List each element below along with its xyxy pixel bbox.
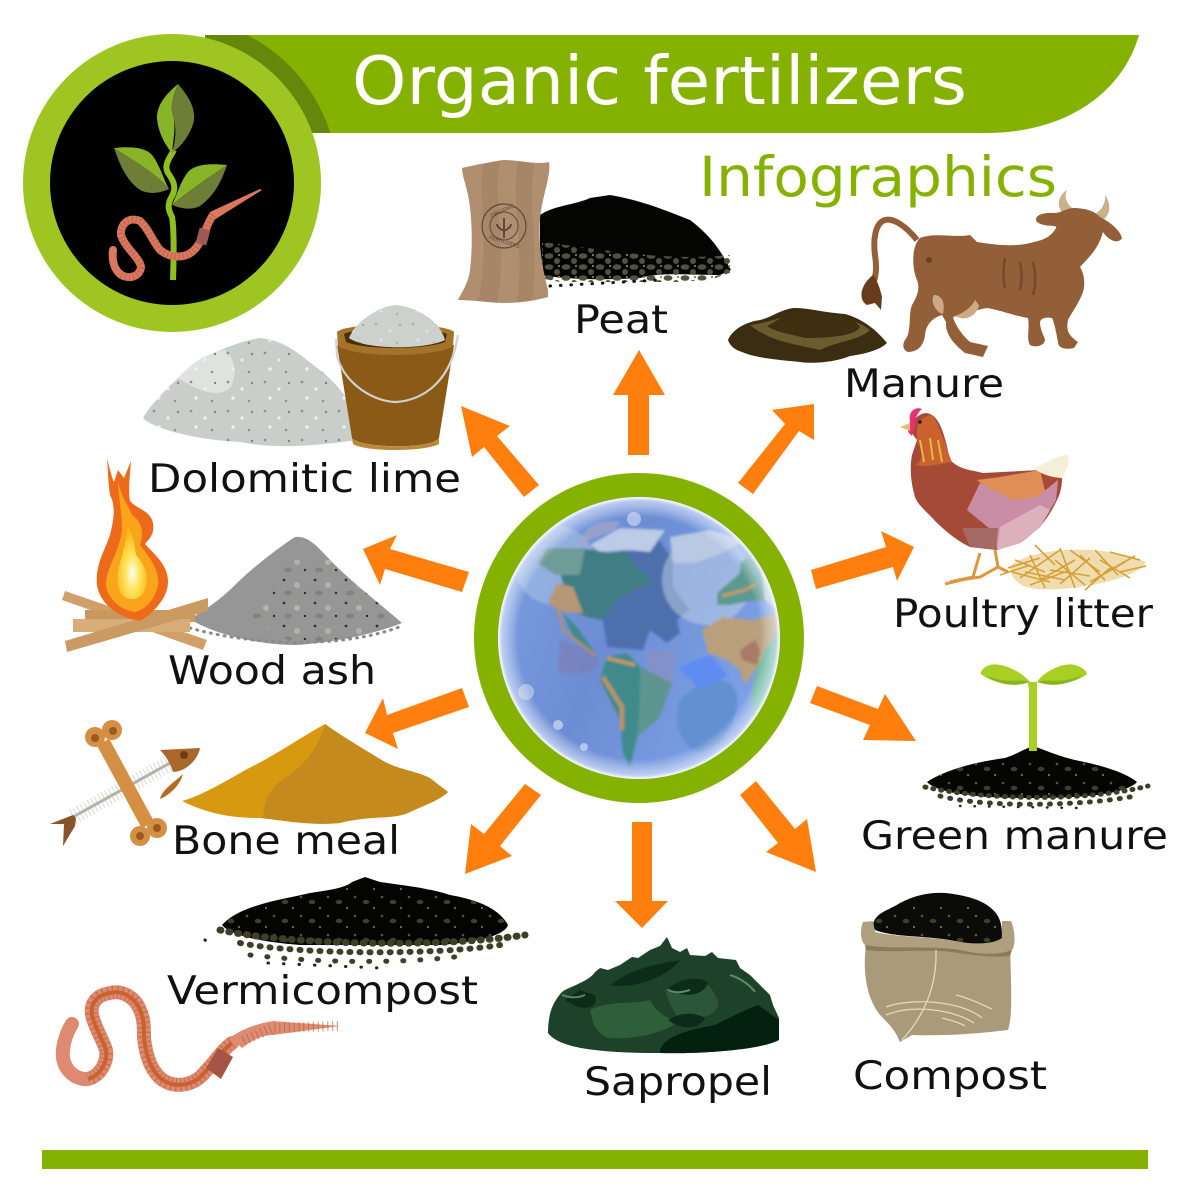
icon: green manure seedling [925, 664, 1148, 808]
central globe [474, 473, 804, 803]
arrow: to Compost [740, 781, 816, 872]
arrow: to Bone meal [365, 688, 469, 749]
label: Green manure: Green manure [861, 814, 1168, 859]
icon: vermicompost pile [205, 877, 525, 968]
arrow: to Manure [738, 404, 814, 494]
arrow: to Dolomitic lime [461, 406, 539, 497]
icon: dolomitic lime pile and bucket [143, 305, 458, 450]
label: Bone meal: Bone meal [172, 819, 400, 864]
africa [702, 612, 782, 685]
icon: poultry hen and straw [900, 408, 1146, 590]
icon: wood ash, fire and ash pile [62, 458, 402, 652]
label: Poultry litter: Poultry litter [893, 592, 1154, 637]
subtitle: Infographics [699, 145, 1057, 209]
sack logo: ORGANIC [490, 203, 516, 220]
label: Sapropel: Sapropel [584, 1060, 772, 1105]
footer bar [42, 1150, 1148, 1169]
south america [599, 652, 642, 768]
label: Manure: Manure [844, 362, 1004, 407]
arrow: to Poultry litter [811, 531, 914, 589]
title text: Organic fertilizers [352, 42, 967, 120]
arrow: to Green manure [810, 686, 916, 741]
logo badge: plant and worm [23, 34, 321, 332]
icon: bone meal, bone, fish and powder [50, 720, 448, 846]
north america [560, 548, 654, 621]
arrow: to Peat [613, 350, 665, 455]
label: Dolomitic lime: Dolomitic lime [148, 457, 461, 502]
icon: manure cow and dung [728, 190, 1122, 363]
sack logo: FERTILIZERS [488, 235, 520, 250]
label: Vermicompost: Vermicompost [167, 969, 478, 1014]
label: Wood ash: Wood ash [168, 649, 376, 694]
arrows radiating from the globe [363, 350, 916, 928]
arrow: to Wood ash [363, 535, 469, 592]
arrow: to Sapropel [615, 822, 668, 928]
label: Peat: Peat [574, 298, 668, 343]
icon: earthworm [63, 992, 340, 1085]
sack logo [482, 203, 526, 250]
atlantic and southern ocean tones [603, 537, 690, 650]
europe [717, 553, 778, 605]
title banner [205, 35, 1139, 133]
label: Compost: Compost [853, 1054, 1047, 1099]
greenland and arctic [670, 530, 745, 563]
icon: compost sack [861, 893, 1015, 1042]
arrow: to Vermicompost [465, 784, 541, 874]
icon: peat sack and pile [458, 160, 731, 303]
clouds [627, 512, 641, 526]
icon: sapropel mound [548, 937, 779, 1053]
